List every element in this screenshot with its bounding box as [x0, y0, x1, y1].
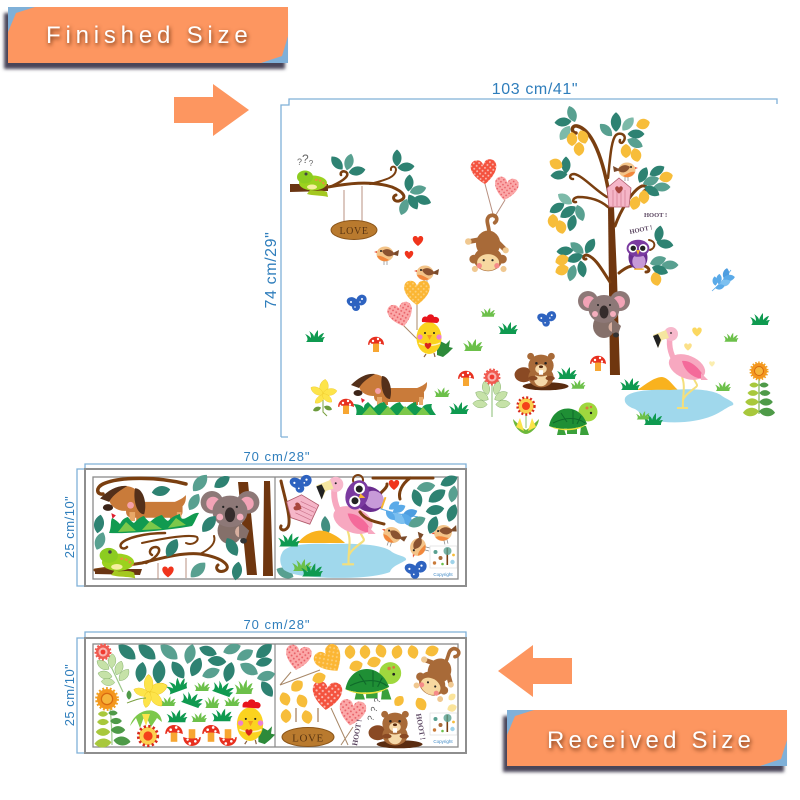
monkey with balloons	[465, 159, 520, 272]
dimension: first sheet height: 25 cm/10"	[62, 496, 77, 558]
tree with birdhouse, owl and koala	[547, 104, 678, 375]
dimension: first sheet height	[62, 469, 85, 586]
right half: flamingo, pond, owl, birdhouse, birds: Copyright	[433, 572, 453, 577]
right half: balloons, turtle, monkey, beaver, love sign: HOOT !	[350, 718, 364, 746]
right half: balloons, turtle, monkey, beaver, love sign: Copyright	[433, 739, 453, 744]
dimension: second sheet width	[85, 617, 466, 638]
heading: Received Size: Received Size	[547, 727, 755, 754]
turtle	[549, 402, 598, 435]
branch with frog and love sign: ?	[302, 152, 309, 166]
flowers	[309, 362, 775, 434]
panel: second sticker sheet	[85, 636, 470, 753]
grass tufts	[305, 308, 770, 425]
right half: balloons, turtle, monkey, beaver, love sign: HOOT !	[414, 713, 428, 741]
dimension: first sheet width	[85, 449, 466, 469]
beaver	[515, 353, 569, 390]
tree with birdhouse, owl and koala: HOOT !	[629, 224, 653, 236]
dimension: second sheet height	[62, 638, 85, 753]
dimension: second sheet width: 70 cm/28"	[243, 617, 311, 632]
branch with frog and love sign: ?	[309, 159, 314, 168]
artwork: finished wall sticker scene	[290, 104, 775, 435]
dimension: first sheet width: 70 cm/28"	[243, 449, 311, 464]
branch with frog and love sign	[290, 150, 433, 240]
left half: dog, koala, frog, branches	[92, 471, 273, 581]
right half: balloons, turtle, monkey, beaver, love sign: ? ? ?	[365, 696, 383, 722]
blue sprig and butterflies	[345, 268, 735, 327]
right half: flamingo, pond, owl, birdhouse, birds	[274, 473, 460, 581]
banner: Finished Size	[4, 7, 288, 69]
tree with birdhouse, owl and koala: HOOT !	[644, 212, 667, 219]
chick with balloons	[386, 281, 453, 357]
heading: Finished Size: Finished Size	[46, 22, 252, 49]
left half: leaves, grass, flowers, mushrooms, chick	[94, 640, 276, 748]
small hearts and birds	[374, 236, 439, 284]
arrow: pointing left to received sheets	[498, 645, 572, 697]
mushrooms	[338, 337, 606, 414]
pond, hill and flamingo	[625, 327, 733, 422]
panel: first sticker sheet	[85, 469, 466, 586]
right half: balloons, turtle, monkey, beaver, love sign: LOVE	[292, 732, 324, 744]
dimension: height of finished artwork: 74 cm/29"	[263, 232, 280, 308]
banner: Received Size	[503, 710, 787, 772]
arrow: pointing right to finished artwork	[174, 84, 249, 136]
branch with frog and love sign: LOVE	[339, 226, 369, 237]
branch with frog and love sign: ?	[297, 157, 302, 167]
right half: balloons, turtle, monkey, beaver, love sign	[278, 636, 470, 748]
dog on grass	[351, 374, 436, 415]
dimension: second sheet height: 25 cm/10"	[62, 664, 77, 726]
dimension: width of finished artwork	[281, 81, 777, 437]
dimension: width of finished artwork: 103 cm/41"	[492, 81, 578, 98]
